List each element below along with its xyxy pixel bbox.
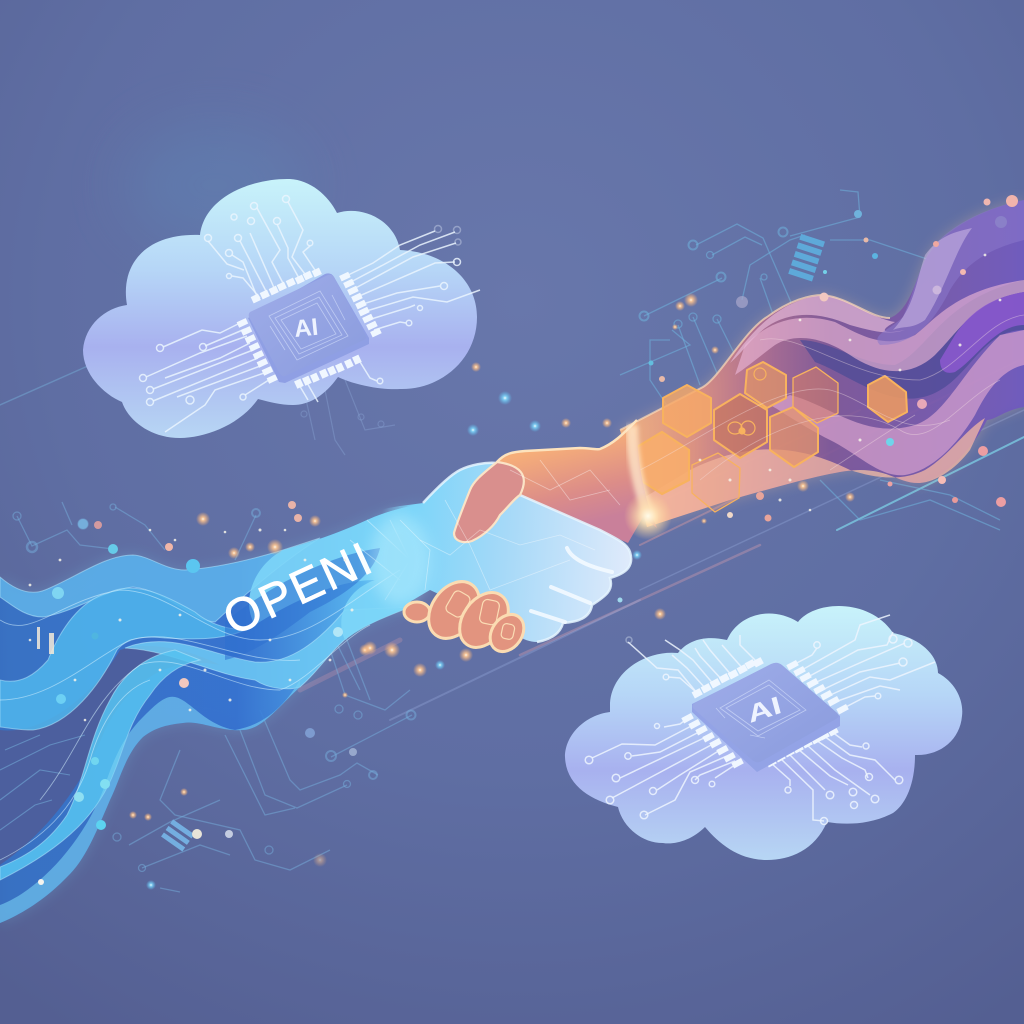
circuit traces: upper right background bbox=[620, 190, 1000, 530]
blue hand outline bbox=[423, 463, 631, 642]
flowing band to wrist bbox=[125, 607, 410, 689]
cloud shape bbox=[83, 179, 477, 438]
lowest ribbon to forearm bbox=[0, 680, 300, 923]
fine filaments bbox=[0, 520, 420, 860]
cloud: bottom right with AI chip bbox=[565, 606, 962, 860]
hexagon cells bbox=[637, 362, 907, 512]
diagonal light streaks bbox=[0, 358, 1024, 720]
glowing particles bbox=[29, 195, 1018, 890]
chip micro circuitry bbox=[269, 291, 348, 360]
bottom pink ribbon bbox=[640, 418, 985, 527]
blue arm with flowing ribbons bbox=[0, 503, 425, 923]
lower pink ribbon bbox=[770, 330, 1024, 475]
orange arm with purple flowing ribbons bbox=[620, 200, 1024, 527]
chip body bbox=[248, 273, 369, 383]
network lines on hand bbox=[400, 460, 620, 590]
thumb bbox=[454, 462, 524, 542]
dark purple gaps bbox=[800, 280, 1024, 399]
background haze bbox=[125, 125, 305, 245]
stray white marks bbox=[37, 627, 54, 654]
dark band behind label bbox=[225, 548, 380, 660]
top ribbon bbox=[0, 538, 320, 622]
upper purple sheet bbox=[877, 200, 1024, 345]
chip pins bbox=[237, 268, 382, 389]
handshake bbox=[370, 420, 672, 658]
finger creases bbox=[531, 548, 612, 622]
cloud: top left with AI chip bbox=[83, 179, 480, 455]
dark gap below lower ribbons bbox=[0, 646, 220, 865]
wrist glow bbox=[370, 515, 430, 605]
faint traces below the top cloud bbox=[301, 380, 395, 455]
arm glow bbox=[620, 200, 1024, 527]
AI label: AI bbox=[744, 692, 784, 729]
fingernails bbox=[444, 589, 515, 640]
circuit traces bbox=[140, 196, 480, 432]
pale upper ribbon bbox=[730, 295, 905, 363]
chip micro circuitry bbox=[716, 680, 806, 738]
orange hand top edge bbox=[497, 420, 637, 462]
pale second ribbon bbox=[735, 280, 1024, 375]
circuit traces bbox=[585, 615, 935, 824]
AI label: AI bbox=[293, 314, 319, 343]
arm base bbox=[0, 503, 425, 923]
wrist light strip bbox=[632, 425, 652, 522]
wrist flare bbox=[624, 492, 672, 540]
chip body bbox=[692, 664, 840, 772]
circuit lines in dark gap bbox=[0, 735, 85, 830]
arm glow bbox=[0, 503, 425, 923]
arm base bbox=[620, 200, 1024, 527]
bright purple fold bbox=[940, 292, 1024, 373]
mesh sheet bbox=[893, 228, 972, 330]
orange fingers bbox=[404, 572, 531, 658]
forearm bright bbox=[249, 503, 425, 640]
blue hand bbox=[380, 463, 631, 642]
middle wide ribbon bbox=[0, 588, 255, 730]
orange hand body bbox=[490, 420, 657, 543]
arm upper edge highlight bbox=[620, 295, 890, 430]
OPENI label: OPENI bbox=[215, 531, 381, 645]
fine filaments bbox=[640, 315, 1024, 480]
chip pins bbox=[681, 657, 849, 768]
hexagon inner glyphs bbox=[728, 368, 766, 435]
circuit traces: lower left background bbox=[13, 502, 416, 892]
lower ribbon bbox=[0, 650, 200, 880]
cloud shape bbox=[565, 606, 962, 860]
